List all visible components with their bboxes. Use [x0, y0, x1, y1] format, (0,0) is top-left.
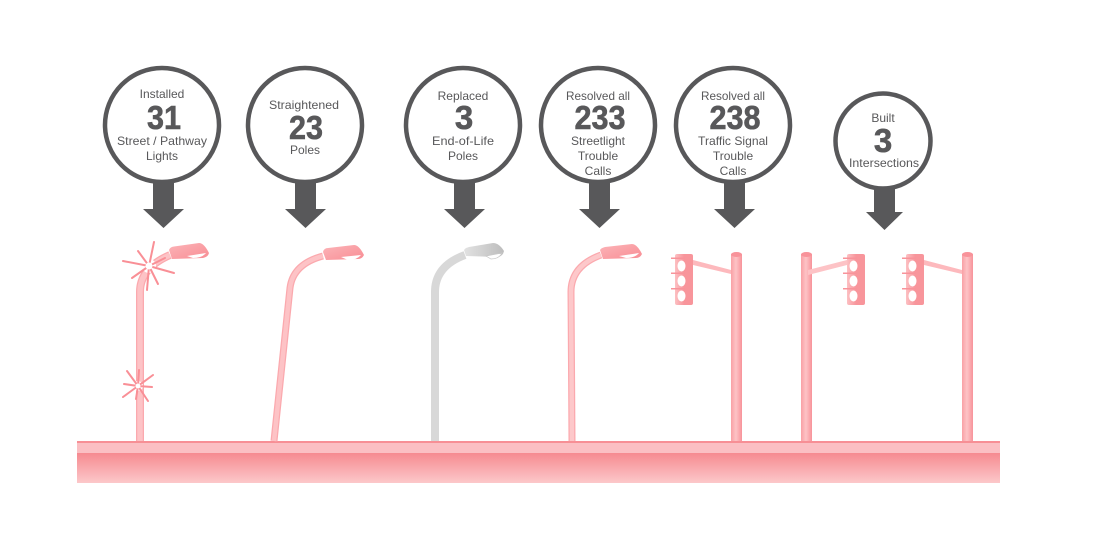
starburst lower [123, 370, 153, 401]
callout: built 3 intersections: Built [871, 111, 895, 125]
arrow 1 [143, 183, 184, 228]
traffic signal 1 [671, 252, 742, 441]
callout: built 3 intersections [836, 94, 930, 188]
arrow 2 [285, 183, 326, 228]
callout: resolved all 233 streetlight trouble calls: 233 [574, 99, 626, 136]
callout: resolved all 233 streetlight trouble calls [541, 68, 655, 182]
callout: built 3 intersections: 3 [874, 122, 892, 159]
callout: installed 31 street / pathway lights: Street / Pathway [117, 134, 207, 148]
arrow 4 [579, 183, 620, 228]
traffic signal 2 [801, 252, 865, 441]
callout: resolved all 233 streetlight trouble calls: Streetlight [571, 134, 626, 148]
callout: resolved all 238 traffic signal trouble calls: 238 [710, 99, 760, 136]
streetlight 4 [571, 244, 642, 441]
callout: replaced 3 end-of-life poles: End-of-Life [432, 134, 494, 148]
callout: resolved all 238 traffic signal trouble calls: Traffic Signal [698, 134, 768, 148]
arrow 5 [714, 183, 755, 228]
streetlight 2 leaning [274, 245, 364, 441]
callout: replaced 3 end-of-life poles: Poles [448, 149, 478, 163]
arrow 6 [866, 189, 903, 230]
callout: straightened 23 poles: Straightened [269, 98, 339, 112]
callout: replaced 3 end-of-life poles [406, 68, 520, 182]
callout: installed 31 street / pathway lights: Lights [146, 149, 178, 163]
callout: resolved all 238 traffic signal trouble calls: Calls [720, 164, 746, 178]
callout: replaced 3 end-of-life poles: 3 [455, 99, 473, 136]
callout: installed 31 street / pathway lights: 31 [147, 99, 181, 136]
callout: resolved all 238 traffic signal trouble calls [676, 68, 790, 182]
arrow 3 [444, 183, 485, 228]
callout: installed 31 street / pathway lights [105, 68, 219, 182]
starburst upper [123, 242, 174, 290]
callout: resolved all 233 streetlight trouble calls: Resolved all [566, 89, 630, 103]
callout: replaced 3 end-of-life poles: Replaced [438, 89, 488, 103]
streetlight 1 with starbursts [123, 242, 209, 441]
road [77, 441, 1000, 483]
streetlight 3 replaced grey [435, 243, 504, 441]
callout: built 3 intersections: Intersections [849, 156, 919, 170]
callout: resolved all 238 traffic signal trouble calls: Trouble [713, 149, 753, 163]
traffic signal 3 [902, 252, 973, 441]
callout: straightened 23 poles [248, 68, 362, 182]
callout: straightened 23 poles: Poles [290, 143, 320, 157]
callout: resolved all 233 streetlight trouble calls: Trouble [578, 149, 618, 163]
callout: resolved all 233 streetlight trouble calls: Calls [585, 164, 611, 178]
callout: installed 31 street / pathway lights: Installed [140, 87, 184, 101]
callout: resolved all 238 traffic signal trouble calls: Resolved all [701, 89, 765, 103]
callout: straightened 23 poles: 23 [289, 109, 323, 146]
